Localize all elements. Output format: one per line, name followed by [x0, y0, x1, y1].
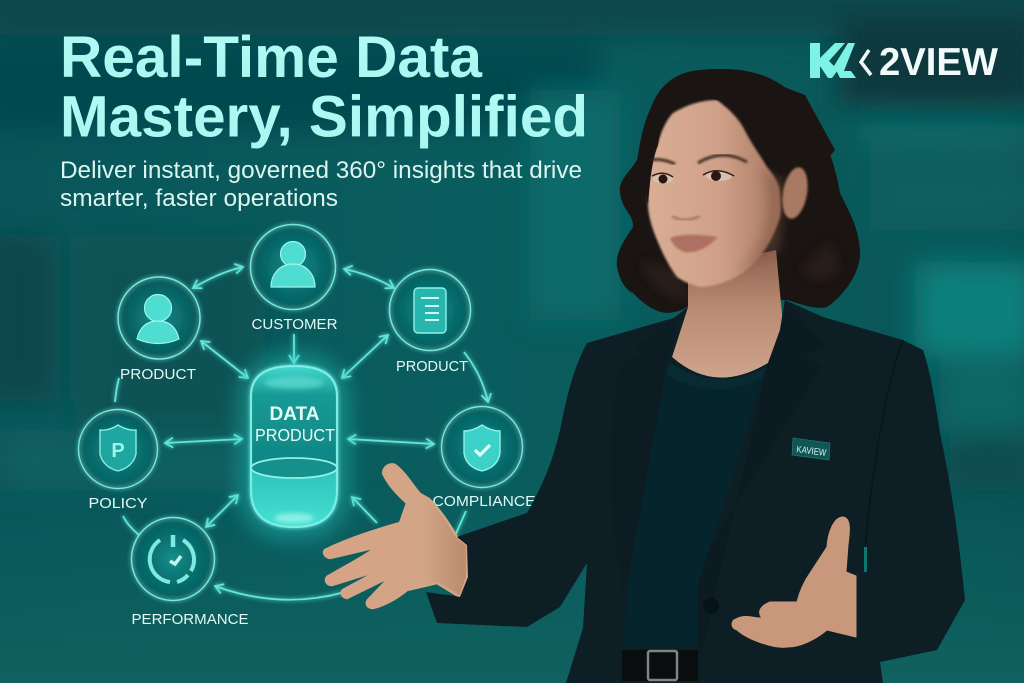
label: data product: PRODUCT: [255, 425, 335, 445]
sleeve seam: [865, 340, 903, 547]
node: product left: [118, 277, 200, 359]
data product cylinder: [238, 353, 350, 540]
mouth: [670, 235, 718, 252]
neck: [672, 250, 783, 378]
arrow: policy to data product: [165, 439, 242, 443]
node: policy: [78, 410, 158, 488]
label: data product: DATA: [270, 404, 320, 425]
eyes: [652, 171, 734, 184]
hair back: [617, 69, 860, 313]
left hand skin: [324, 464, 467, 608]
label: policy: POLICY: [88, 495, 148, 512]
logo chevron: [861, 50, 871, 75]
title: Real-Time Data: [60, 25, 483, 90]
icon: shield P: P: [111, 440, 125, 462]
shirt collar: [667, 362, 767, 389]
label: compliance: COMPLIANCE: [432, 493, 536, 510]
right hand skin: [732, 517, 856, 647]
belt buckle: [648, 651, 677, 680]
link: compliance to hand: [454, 511, 466, 538]
ear: [779, 165, 811, 221]
icon: person: [137, 294, 179, 344]
arrow: customer to data product: [293, 334, 295, 363]
presenter: [324, 69, 965, 683]
arrow: bottom curve to performance: [215, 586, 345, 600]
face: [648, 100, 781, 287]
belt: [622, 650, 698, 681]
diagram connectors: [115, 267, 488, 600]
logo wordmark: 2VIEW: [879, 41, 998, 84]
arrow: product to data product: [201, 341, 248, 378]
name badge: KAVIEW: [796, 444, 827, 459]
logo: K2VIEW: [810, 41, 998, 84]
nose: [672, 216, 700, 220]
subtitle: [60, 157, 582, 212]
link: product to policy: [115, 378, 119, 402]
label: product right: PRODUCT: [396, 358, 468, 375]
node: compliance: [442, 406, 522, 488]
arrow: customer to product: [193, 267, 243, 288]
title: Mastery, Simplified: [60, 84, 588, 150]
arrow: data product to compliance: [348, 439, 434, 444]
lapel right: [697, 300, 827, 660]
jacket body and arms: [426, 300, 965, 683]
node: product right: [390, 270, 470, 350]
logo mark: [810, 43, 856, 78]
arrow: performance to data product: [206, 495, 238, 527]
label: customer: CUSTOMER: [252, 316, 338, 333]
arrow: right product to data product: [342, 335, 388, 378]
face shadow: [735, 170, 785, 275]
eyebrows: [651, 155, 747, 164]
node: performance: [132, 518, 214, 600]
arrow: customer to right product: [344, 269, 394, 288]
subtitle: smarter, faster operations: [60, 185, 338, 212]
icon: gauge: [150, 535, 194, 582]
arrow: hand to data product: [352, 497, 377, 523]
label: data product: [255, 404, 335, 445]
icon: shield check: [464, 425, 500, 471]
shirt: [623, 363, 767, 647]
title: [60, 25, 588, 150]
name badge: [792, 438, 830, 460]
label: product left: PRODUCT: [120, 366, 196, 383]
link: policy to performance: [123, 516, 139, 535]
cuff over wrist: [445, 513, 527, 627]
subtitle: Deliver instant, governed 360° insights that drive: [60, 157, 582, 184]
blazer button: [703, 598, 719, 614]
label: performance: PERFORMANCE: [132, 611, 248, 628]
icon: document: [414, 288, 446, 333]
icon: person: [271, 242, 315, 287]
arrow: right product to compliance: [464, 352, 488, 402]
node: customer: [250, 224, 336, 310]
teal gap by right arm: [864, 547, 867, 572]
hair highlight: [640, 240, 840, 300]
hair front: [640, 72, 835, 205]
lapel left: [610, 307, 688, 593]
